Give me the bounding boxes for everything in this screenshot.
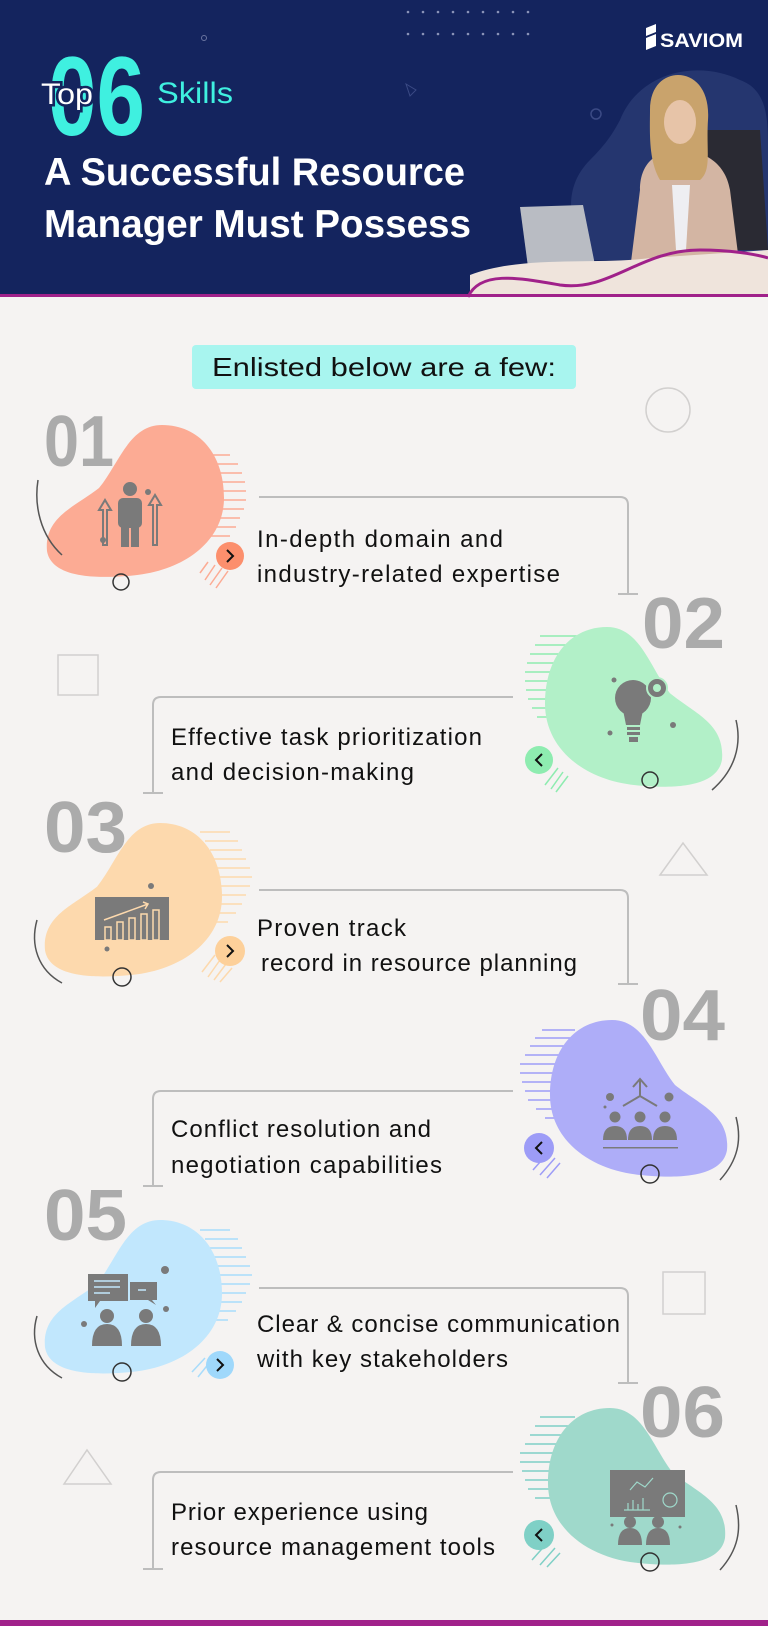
item 01 <box>37 402 638 594</box>
subtitle pill: Enlisted below are a few: <box>212 352 556 382</box>
text: skill 4: Conflict resolution and <box>171 1116 431 1143</box>
text: skill 1: industry-related expertise <box>257 561 560 588</box>
icon: person with arrows <box>99 482 161 547</box>
logo: SAVIOM <box>646 24 743 52</box>
item 02: 02 <box>642 584 725 664</box>
text: skill 1: In-depth domain and <box>257 526 503 553</box>
text: skill 5: Clear & concise communication <box>257 1311 620 1338</box>
item 03 <box>35 788 638 986</box>
icon: lightbulb gear <box>608 678 676 742</box>
item 02 <box>143 584 738 793</box>
subtitle pill <box>192 345 576 389</box>
logo: SAVIOM: SAVIOM <box>660 31 743 52</box>
title: Top 06 Skills: Skills <box>157 77 233 110</box>
item 05: 05 <box>44 1176 127 1256</box>
text: skill 5: with key stakeholders <box>256 1346 508 1373</box>
text: skill 3: Proven track <box>257 915 407 942</box>
title: Top 06 Skills: Top <box>41 78 93 111</box>
item 03: 03 <box>44 788 127 868</box>
title: main heading <box>44 151 471 246</box>
title: Top 06 Skills: 06 <box>48 34 145 159</box>
icon: growth chart <box>95 883 169 952</box>
text: skill 2: Effective task prioritization <box>171 724 482 751</box>
title: main heading: Manager Must Possess <box>44 203 471 246</box>
item 04 <box>143 976 739 1186</box>
item 01: 01 <box>44 402 114 482</box>
title: main heading: A Successful Resource <box>44 151 465 194</box>
decorative shapes <box>58 388 707 1484</box>
header banner <box>0 0 768 297</box>
item 06 <box>143 1373 739 1571</box>
icon: team growth <box>603 1079 678 1148</box>
item 04: 04 <box>640 976 725 1056</box>
text: skill 4: negotiation capabilities <box>171 1152 442 1179</box>
text: skill 2: and decision-making <box>171 759 414 786</box>
text: skill 3: record in resource planning <box>261 950 577 977</box>
item 06: 06 <box>640 1373 725 1453</box>
footer bar <box>0 1620 768 1626</box>
text: skill 6: Prior experience using <box>171 1499 428 1526</box>
photo: woman at laptop <box>468 70 768 297</box>
icon: presentation dashboard <box>610 1470 685 1545</box>
item 05 <box>35 1176 638 1383</box>
icon: communication <box>81 1266 169 1346</box>
text: skill 6: resource management tools <box>171 1534 495 1561</box>
title: Top 06 Skills <box>41 34 233 159</box>
